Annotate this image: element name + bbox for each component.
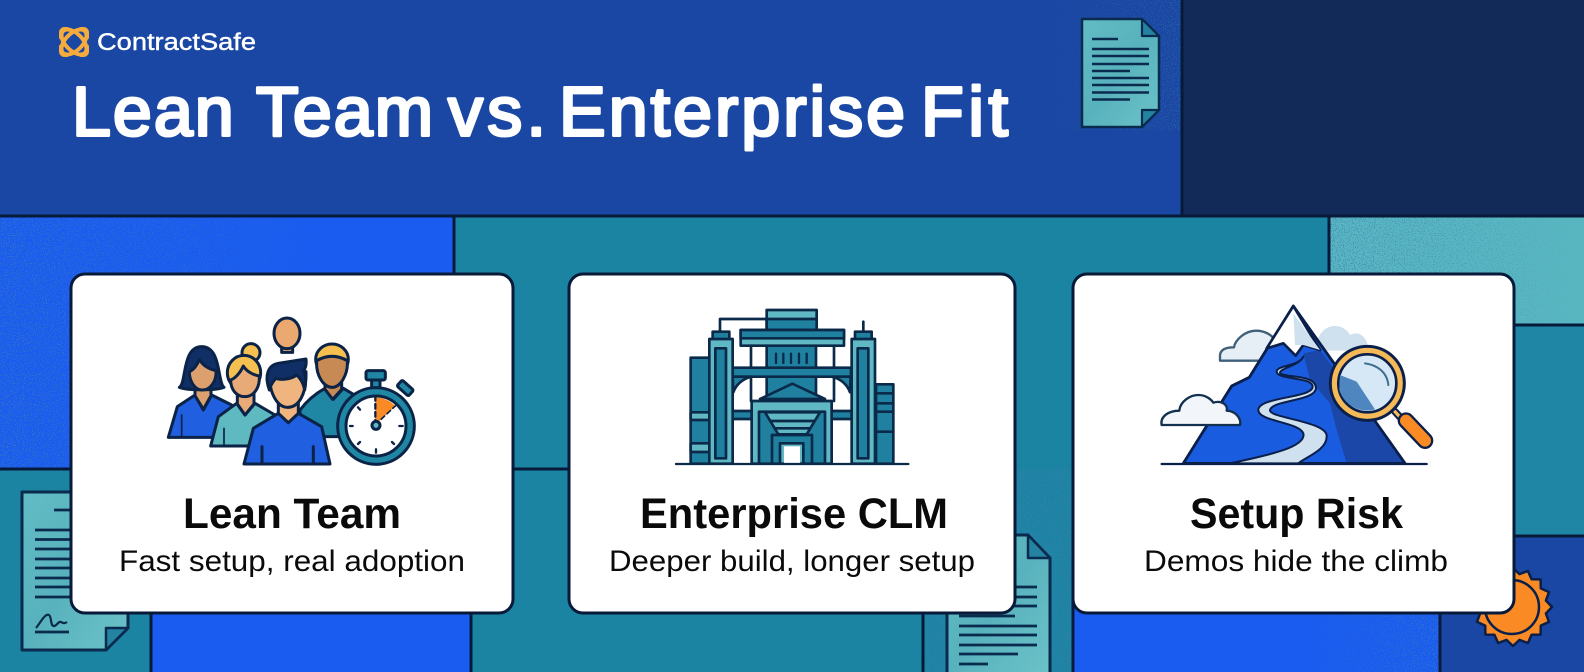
side buildings [691,358,893,464]
logo: ContractSafe [57,25,256,59]
ground line [676,460,908,467]
card subtitle: Fast setup, real adoption [119,545,465,578]
back right person [300,344,360,437]
card heading: Setup Risk [1190,490,1403,538]
icon: logo mark [57,25,91,59]
card subtitle: Deeper build, longer setup [609,545,975,578]
icon: document top right [1082,19,1159,127]
title: Fit [921,72,1008,150]
panel: light teal block top right [1329,216,1584,325]
stopwatch [338,371,414,464]
title: Enterprise [559,72,905,150]
winding road [1230,357,1327,463]
icon: document bottom center [947,535,1050,672]
left and right towers [709,322,875,464]
panel: card Setup Risk [1073,274,1514,613]
panel: card Lean Team [71,274,513,613]
card subtitle: Demos hide the climb [1144,545,1448,578]
back clouds [1220,326,1368,361]
card heading: Lean Team [183,490,401,538]
panel: blue block bottom right [1074,608,1438,672]
central tower [720,310,844,402]
mountain body [1183,306,1405,463]
top person head [274,318,300,352]
left woman [168,347,237,437]
icon: signed document bottom left [22,492,128,650]
icon: team with stopwatch [168,318,414,464]
panel: teal block bottom center [471,469,923,672]
panel: teal block bottom left [0,469,151,672]
panel: navy corner block [1182,0,1584,216]
panel: blue block bottom left [151,469,471,672]
front man [244,359,330,464]
portal [752,384,832,464]
ground line [1162,460,1427,467]
title [72,72,1008,150]
panel: teal block right [1446,325,1584,536]
middle woman [211,344,280,446]
magnifier [1330,346,1425,441]
horizontal bridges [733,368,852,419]
icon: mountain with magnifier [1161,306,1427,464]
title: Lean Team [72,72,433,150]
logo wordmark: ContractSafe [97,29,256,56]
card heading: Enterprise CLM [640,490,948,538]
icon: enterprise buildings [676,310,908,464]
panel: textured teal strip [923,469,1073,672]
panel: blue block top left [0,216,454,469]
panel: teal block center [454,216,1329,469]
title: vs. [448,72,546,150]
panel: header band [1078,0,1180,130]
icon: orange sun [1474,568,1552,646]
front cloud [1161,395,1240,425]
panel: dark blue block bottom right [1440,536,1584,672]
panel: card Enterprise CLM [569,274,1015,613]
